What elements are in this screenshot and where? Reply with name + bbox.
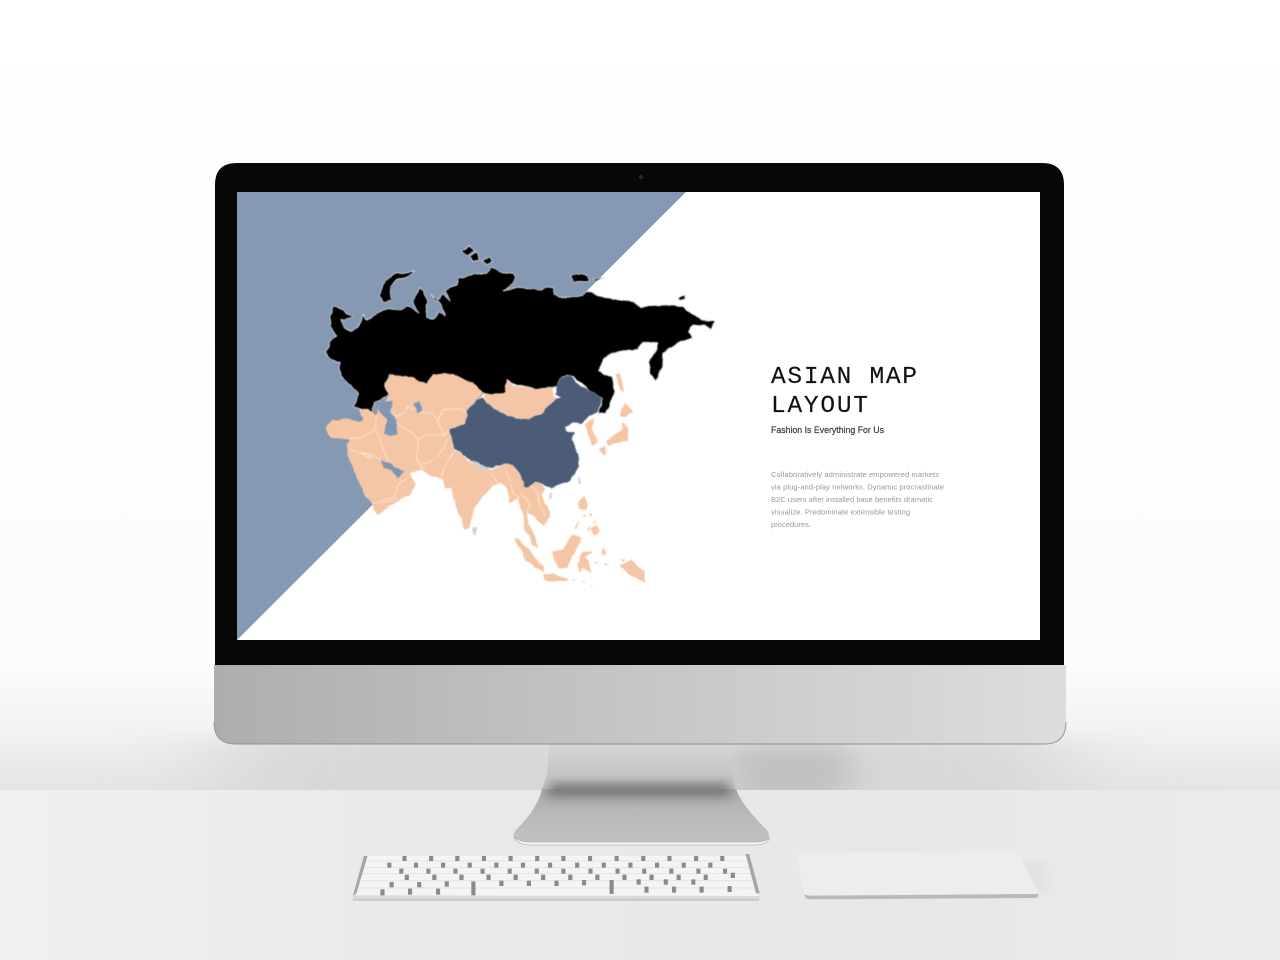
keyboard top face (354, 856, 758, 896)
body paragraph: B2C users after installed base benefits dramatic (771, 495, 933, 504)
map of Asia (327, 246, 715, 587)
country borders (347, 407, 545, 517)
foot lip (514, 837, 770, 845)
title: LAYOUT (771, 393, 868, 420)
keyboard (353, 854, 760, 901)
blue diagonal panel (237, 192, 686, 640)
monitor bezel (215, 163, 1064, 665)
stand neck (542, 744, 735, 790)
trackpad (797, 851, 1047, 899)
desk surface (0, 790, 1280, 960)
Asia countries (327, 374, 645, 587)
keyboard base lip (353, 895, 759, 901)
slide screen (237, 192, 1040, 640)
wall shadow under monitor (204, 742, 1076, 790)
East Asia and Southeast Asia islands (513, 374, 645, 587)
body paragraph: via plug-and-play networks. Dynamic procrastinate (771, 482, 944, 492)
inland seas (341, 401, 423, 478)
title: ASIAN MAP (771, 364, 917, 391)
body paragraph: procedures. (771, 520, 811, 529)
trackpad surface (797, 851, 1038, 896)
dark shadow band (546, 783, 731, 797)
monitor stand (513, 744, 770, 845)
peach countries silhouette (327, 374, 551, 548)
monitor chin (214, 665, 1066, 744)
monitor body (214, 163, 1066, 744)
screen white background (237, 192, 1040, 640)
stand foot (513, 789, 769, 843)
body paragraph: Collaboratively administrate empowered markets (771, 470, 939, 479)
webcam (639, 175, 643, 179)
trackpad shadow (1017, 863, 1047, 893)
body paragraph: visualize. Predominate extensible testing (771, 508, 910, 516)
trackpad lip (805, 892, 1038, 899)
China (450, 376, 602, 488)
subtitle: Fashion Is Everything For Us (771, 425, 884, 436)
small grey islands (471, 461, 581, 536)
Russia region (327, 246, 715, 414)
Mongolia (483, 380, 560, 420)
